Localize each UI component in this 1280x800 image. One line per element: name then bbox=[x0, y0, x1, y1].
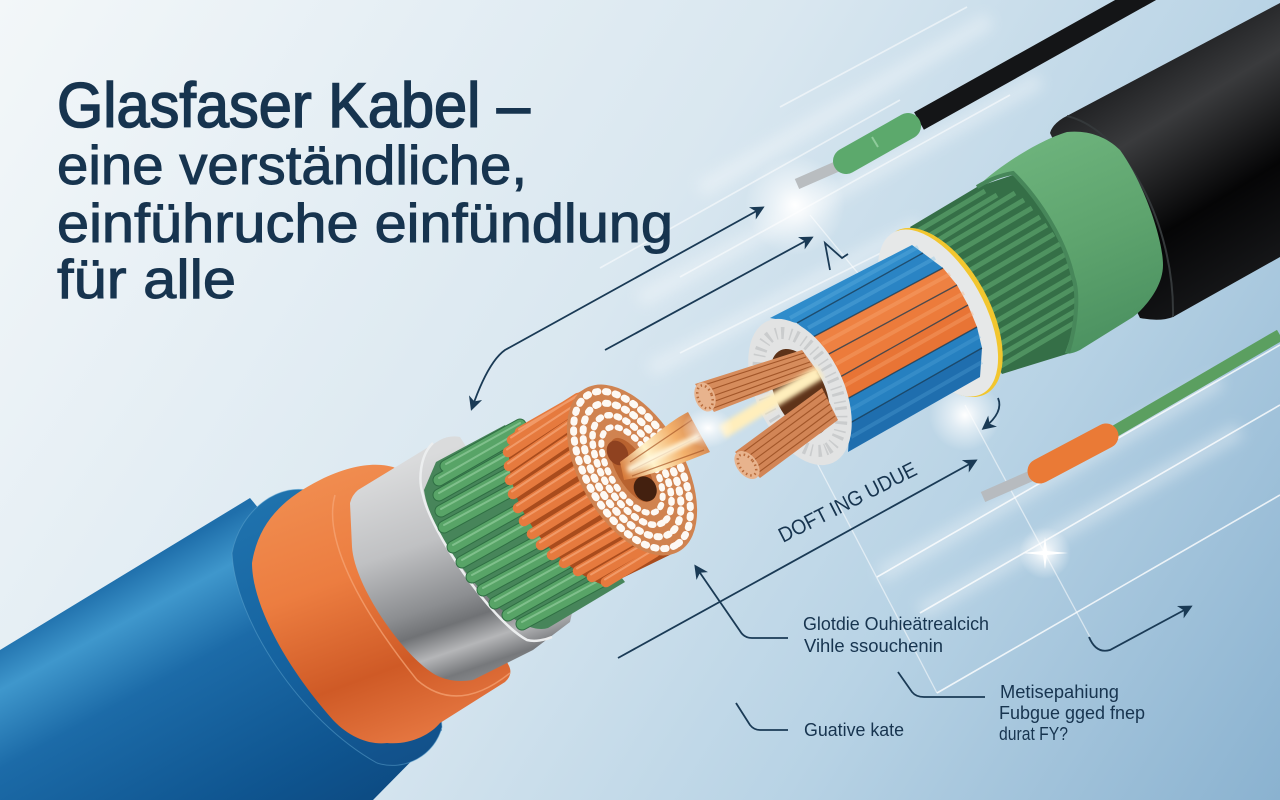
arrows and leader lines bbox=[472, 208, 1190, 730]
green ribbed layer bbox=[910, 175, 1086, 374]
callout one bbox=[803, 614, 989, 656]
light rays bbox=[600, 7, 1280, 693]
curved double arrow bbox=[984, 398, 999, 428]
front ring bbox=[727, 303, 873, 481]
large cable lower left bbox=[0, 363, 724, 800]
rotated label: DOFT ING UDUE bbox=[775, 458, 921, 547]
light flares bbox=[745, 155, 1071, 579]
orange sheath bbox=[252, 465, 510, 743]
leader three bbox=[736, 703, 788, 730]
title bbox=[57, 71, 673, 310]
copper bundle lower bbox=[729, 388, 838, 484]
arrow right bbox=[1089, 607, 1190, 651]
green collar bbox=[977, 132, 1163, 354]
yellow and white ring bbox=[853, 208, 1028, 418]
arrow three bbox=[618, 461, 975, 658]
blue collar bbox=[232, 480, 442, 765]
connector top with black wire bbox=[797, 0, 1175, 184]
large cable upper right bbox=[682, 3, 1280, 484]
gray shield bbox=[350, 436, 572, 681]
glowing fiber bundle bbox=[620, 412, 710, 480]
small squiggle bbox=[825, 243, 848, 270]
callout two bbox=[999, 682, 1145, 744]
callout one: Glotdie Ouhieätrealcich bbox=[803, 614, 989, 634]
leader two bbox=[898, 672, 985, 697]
copper strands bbox=[507, 390, 690, 586]
callout two: Metisepahiung bbox=[1000, 682, 1119, 702]
callout three: Guative kate bbox=[804, 720, 904, 740]
title: einführuche einfündlung bbox=[57, 192, 673, 254]
green strands bbox=[420, 423, 625, 641]
leader with arrow bbox=[696, 567, 788, 638]
arrow two bbox=[605, 238, 811, 350]
cable end face bbox=[540, 363, 724, 577]
title: für alle bbox=[57, 248, 236, 310]
center glow bbox=[682, 408, 734, 448]
connector right with green wire bbox=[983, 335, 1280, 497]
copper bundle upper bbox=[690, 350, 818, 415]
title: Glasfaser Kabel – bbox=[57, 71, 530, 141]
callout one: Vihle ssouchenin bbox=[804, 636, 943, 656]
callout two: durat FY? bbox=[999, 724, 1068, 744]
blue outer jacket bbox=[0, 498, 442, 800]
double arrow top bbox=[472, 208, 762, 408]
callout two: Fubgue gged fnep bbox=[999, 703, 1145, 723]
title: eine verständliche, bbox=[57, 134, 527, 196]
black outer jacket bbox=[1050, 3, 1280, 320]
light beam bbox=[722, 372, 820, 432]
blue and orange tubes bbox=[770, 245, 982, 452]
